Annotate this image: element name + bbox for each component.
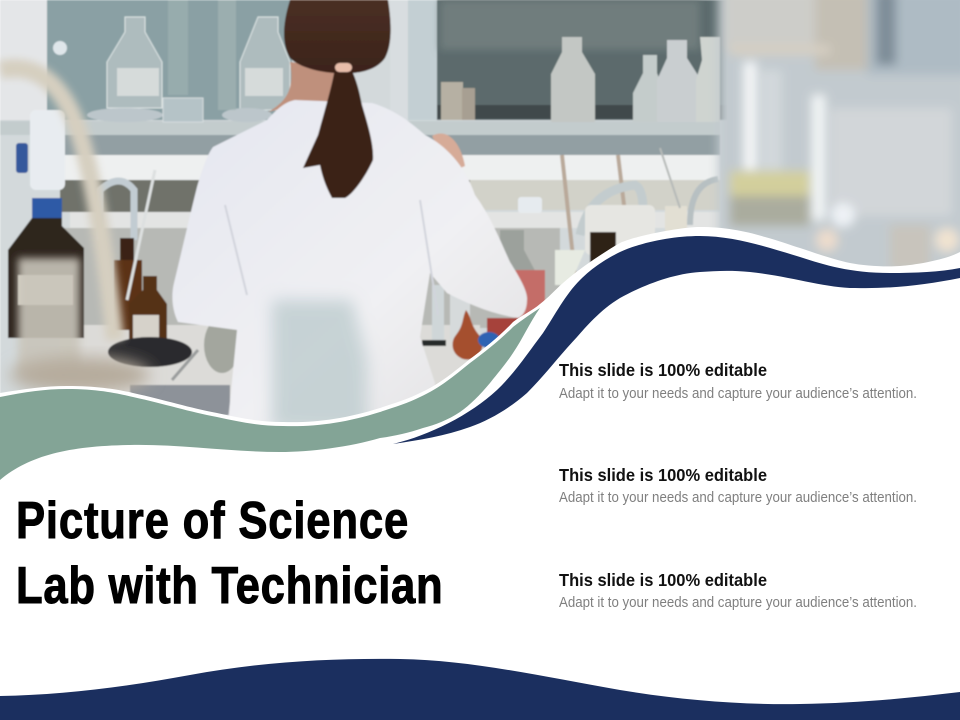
photo background: lab wall and benches [0,0,960,460]
navy swoosh [393,236,960,444]
photo: amber bottles on the bench [8,170,240,380]
photo: blue and white lab apparatus [16,110,134,240]
text block 3: Adapt it to your needs and capture your audience’s attention. [559,594,917,611]
text block 1: This slide is 100% editable [559,360,767,380]
title [16,493,443,615]
text block 2 [559,465,917,506]
technician: hair tie [335,63,352,72]
text block 1: Adapt it to your needs and capture your audience’s attention. [559,385,917,402]
photo: lab technician at work [0,0,960,460]
text block 3: This slide is 100% editable [559,570,767,590]
white backdrop below the waves [0,227,960,720]
photo: blurred foreground glassware on the right [718,0,960,290]
photo: right side bench apparatus and pipettes [422,148,718,360]
text block 2: This slide is 100% editable [559,465,767,485]
text block 1 [559,360,917,402]
title: Lab with Technician [16,558,443,615]
photo: blurred foreground tubing and bottles [0,68,367,430]
technician: hand and neck [432,134,465,172]
bottom navy wave [0,659,960,720]
title: Picture of Science [16,493,408,550]
sage swoosh [0,308,540,480]
text block 2: Adapt it to your needs and capture your audience’s attention. [559,489,917,506]
technician: lab coat [172,100,527,422]
photo: technician in a white coat [172,0,527,422]
text block 3 [559,570,917,611]
photo: shelf glassware [53,0,720,122]
technician: dark hair and ponytail [284,0,391,198]
